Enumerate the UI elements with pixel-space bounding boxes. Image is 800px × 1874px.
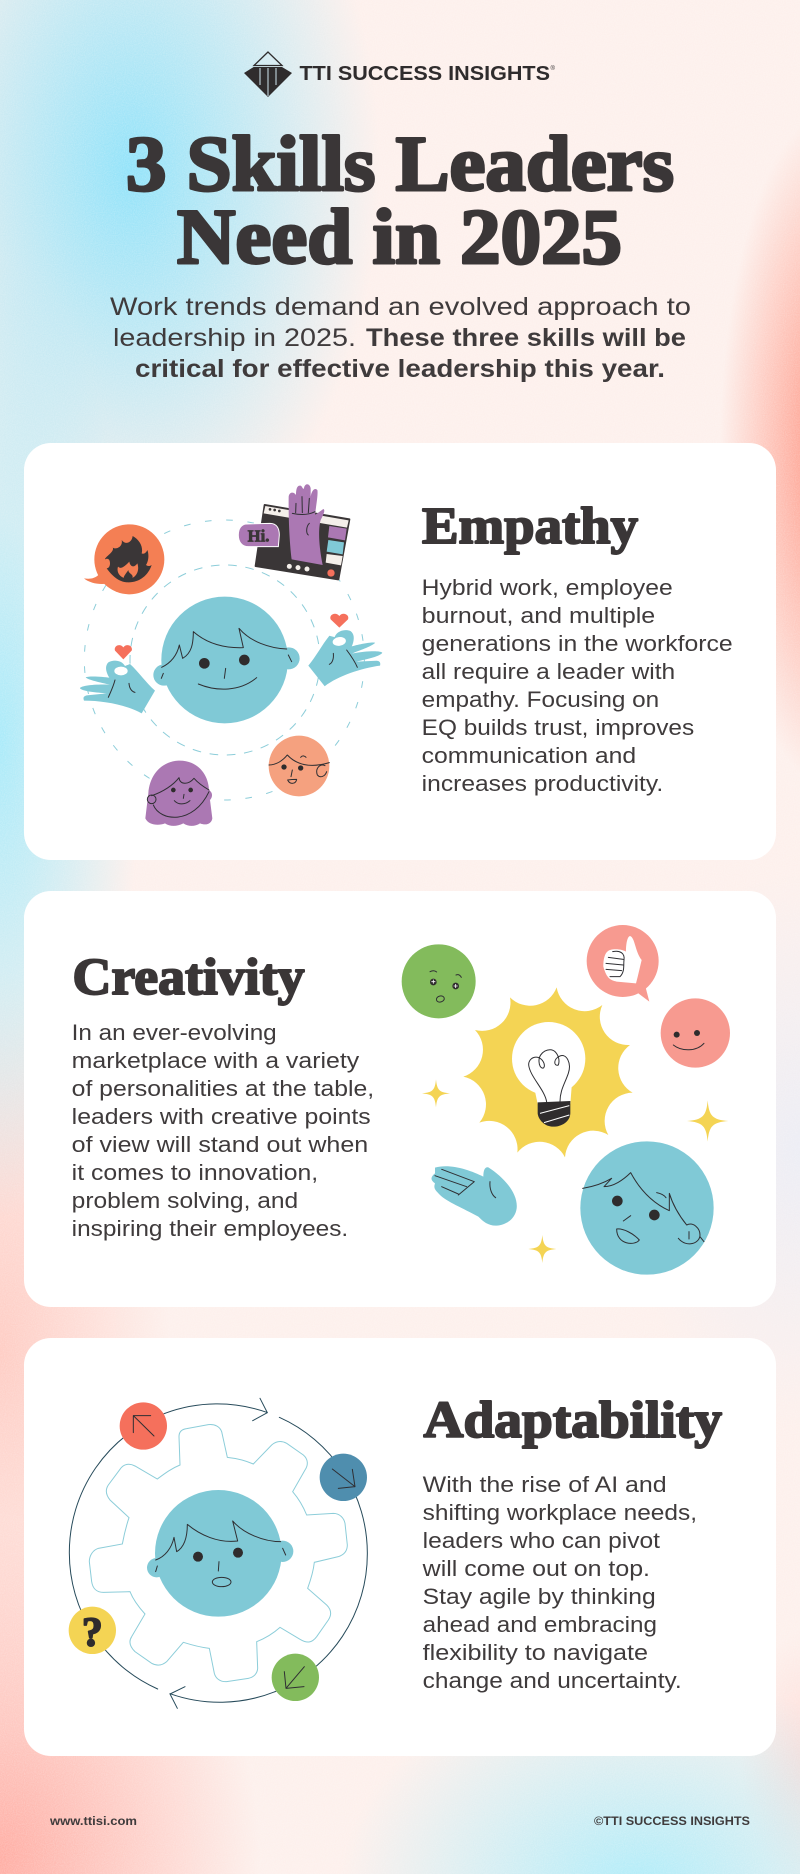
icon: pink face (661, 998, 730, 1068)
icon: open hand (431, 1166, 517, 1226)
adaptability body text: change and uncertainty. (423, 1668, 682, 1693)
logo wordmark: ® (550, 65, 556, 72)
creativity body text: inspiring their employees. (72, 1216, 348, 1241)
adaptability body text: will come out on top. (422, 1556, 650, 1581)
empathy body text: EQ builds trust, improves (422, 715, 694, 740)
intro text: leadership in 2025. (113, 324, 356, 352)
adaptability body text: ahead and embracing (423, 1612, 657, 1637)
empathy illustration (80, 484, 386, 826)
creativity body text: leaders with creative points (72, 1104, 371, 1129)
title: 3 Skills Leaders (126, 120, 674, 207)
icon: green arrow circle (272, 1654, 319, 1701)
empathy body text: all require a leader with (422, 659, 675, 684)
adaptability body text: shifting workplace needs, (423, 1500, 697, 1525)
icon: gear outline (89, 1425, 347, 1682)
icon: thumbs up bubble (587, 925, 659, 1002)
icon: sparkles (422, 1079, 728, 1263)
adaptability body text: leaders who can pivot (423, 1528, 660, 1553)
adaptability card background (24, 1338, 776, 1756)
logo wordmark: TTI SUCCESS INSIGHTS (300, 62, 550, 85)
adaptability body text: Stay agile by thinking (423, 1584, 656, 1609)
adaptability illustration (69, 1398, 367, 1708)
panel: creativity (24, 891, 776, 1307)
icon: video call window (238, 484, 349, 579)
icon: main face (153, 597, 300, 723)
adaptability body text (422, 1472, 697, 1693)
logo: TTI Success Insights (244, 52, 556, 97)
creativity heading: Creativity (72, 949, 304, 1006)
intro text (110, 293, 691, 383)
footer copyright: ©TTI SUCCESS INSIGHTS (594, 1814, 750, 1828)
icon: speech bubble with fire (84, 524, 164, 594)
icon: cycle ring with arrowheads (69, 1398, 367, 1708)
intro text: Work trends demand an evolved approach to (110, 293, 691, 321)
empathy body text: burnout, and multiple (422, 603, 655, 628)
icon: light bulb burst (463, 987, 633, 1157)
creativity illustration (402, 925, 730, 1275)
icon: green face (402, 944, 476, 1018)
icon: right hand with heart (304, 614, 386, 688)
empathy heading: Empathy (422, 498, 638, 555)
icon: orange face (269, 736, 329, 796)
creativity body text: it comes to innovation, (72, 1160, 318, 1185)
empathy body text: communication and (422, 743, 636, 768)
creativity body text: of personalities at the table, (72, 1076, 374, 1101)
intro text: These three skills will be (366, 324, 686, 352)
icon: purple face (145, 761, 212, 826)
creativity body text: of view will stand out when (72, 1132, 368, 1157)
creativity body text: In an ever-evolving (72, 1020, 277, 1045)
empathy body text: empathy. Focusing on (422, 687, 659, 712)
creativity body text: marketplace with a variety (72, 1048, 359, 1073)
panel: adaptability (24, 1338, 776, 1756)
icon: left hand with heart (80, 645, 155, 713)
empathy body text: generations in the workforce (422, 631, 733, 656)
footer website: www.ttisi.com (49, 1814, 137, 1828)
creativity body text: problem solving, and (72, 1188, 298, 1213)
empathy body text (422, 575, 733, 796)
title: Need in 2025 (177, 193, 622, 280)
icon: big blue face (580, 1141, 714, 1275)
adaptability body text: With the rise of AI and (423, 1472, 667, 1497)
icon: blue arrow circle (320, 1454, 367, 1501)
title (126, 120, 674, 280)
icon: red arrow circle (120, 1402, 167, 1450)
adaptability heading: Adaptability (424, 1392, 722, 1449)
icon: central face (147, 1490, 293, 1617)
icon: yellow question circle: ? (82, 1609, 103, 1655)
adaptability body text: flexibility to navigate (423, 1640, 648, 1665)
intro text: critical for effective leadership this year. (135, 355, 665, 383)
empathy body text: Hybrid work, employee (422, 575, 673, 600)
icon: yellow question circle (69, 1607, 116, 1655)
creativity card background (24, 891, 776, 1307)
empathy body text: increases productivity. (422, 771, 663, 796)
empathy card background (24, 443, 776, 860)
icon: diamond logo mark (244, 52, 292, 97)
panel: empathy (24, 443, 776, 860)
creativity body text (72, 1020, 374, 1241)
icon: video call window: Hi. (248, 527, 269, 546)
